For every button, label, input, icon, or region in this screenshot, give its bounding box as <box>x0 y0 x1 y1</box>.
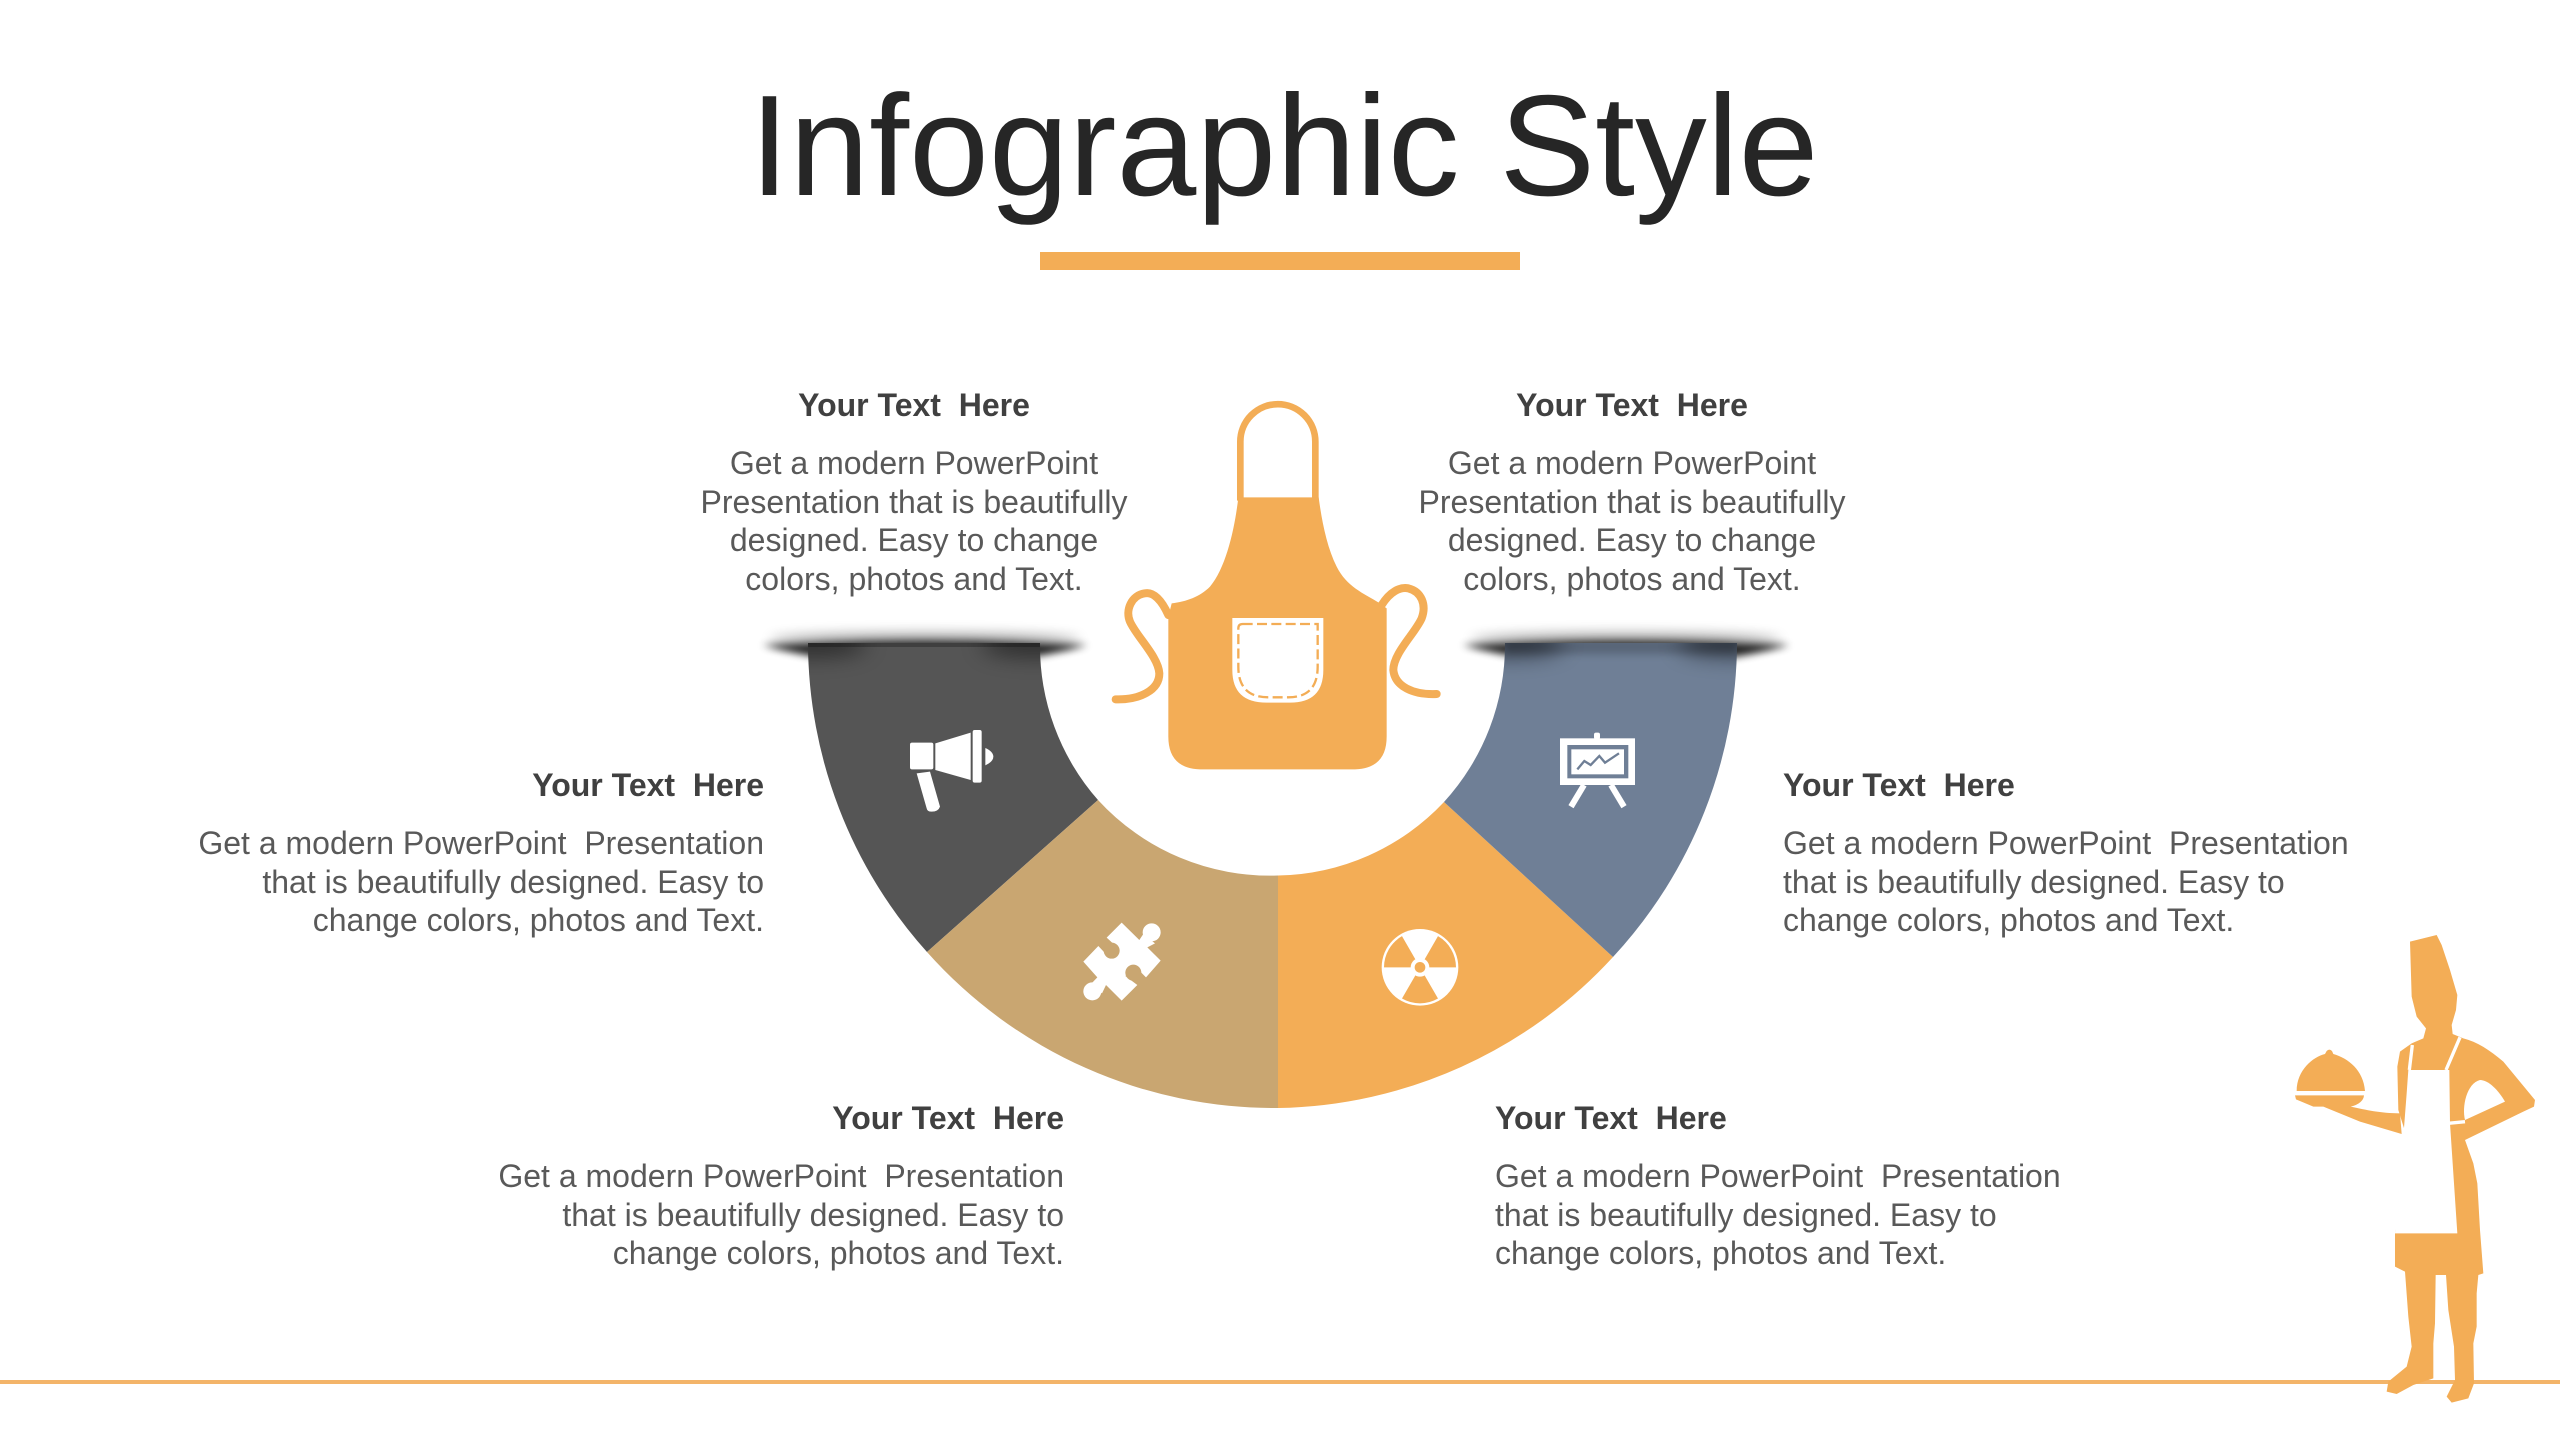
icon: megaphone <box>910 730 993 812</box>
text block: bottom right <box>1495 1100 2061 1271</box>
segment: orange <box>1278 802 1613 1108</box>
body: Get a modern PowerPoint Presentation that is beautifully designed. Easy to change colors, photos and Text. <box>198 825 764 938</box>
icon: puzzle piece <box>1083 923 1161 1001</box>
text block: middle left <box>198 767 764 938</box>
body: Get a modern PowerPoint Presentation that is beautifully designed. Easy to change colors, photos and Text. <box>701 445 1127 597</box>
title: Infographic Style <box>750 66 1818 226</box>
title underline <box>1040 252 1520 270</box>
text block: top left <box>701 387 1128 597</box>
apron straps <box>2409 1037 2465 1123</box>
icon: radiation symbol <box>1382 929 1458 1006</box>
segment: slate blue <box>1444 643 1737 957</box>
shadow: right ribbon <box>1462 633 1790 666</box>
heading: Your Text Here <box>532 767 764 803</box>
heading: Your Text Here <box>1495 1100 1727 1136</box>
chef left arm and hand <box>2295 1095 2402 1134</box>
body: Get a modern PowerPoint Presentation that is beautifully designed. Easy to change colors, photos and Text. <box>498 1158 1064 1271</box>
segment: dark grey <box>808 643 1098 952</box>
text block: middle right <box>1783 767 2349 938</box>
body: Get a modern PowerPoint Presentation that is beautifully designed. Easy to change colors, photos and Text. <box>1783 825 2349 938</box>
inner shading: dark segment <box>808 643 1040 666</box>
icon: apron <box>1116 404 1437 769</box>
heading: Your Text Here <box>832 1100 1064 1136</box>
icon: chef silhouette <box>2295 935 2535 1403</box>
baseline rule <box>0 1380 2560 1384</box>
apron cut-out <box>2395 1070 2457 1233</box>
text block: top right <box>1419 387 1846 597</box>
heading: Your Text Here <box>798 387 1030 423</box>
text block: bottom left <box>498 1100 1064 1271</box>
heading: Your Text Here <box>1516 387 1748 423</box>
cloche <box>2297 1050 2365 1091</box>
cut-out between arm and waist <box>2464 1080 2505 1120</box>
shadow: left ribbon <box>762 633 1088 666</box>
infographic artwork <box>0 252 2560 1403</box>
icon: presentation easel <box>1560 733 1635 807</box>
inner shading: blue segment <box>1504 643 1737 669</box>
segment: tan <box>927 800 1278 1108</box>
body: Get a modern PowerPoint Presentation that is beautifully designed. Easy to change colors, photos and Text. <box>1419 445 1845 597</box>
heading: Your Text Here <box>1783 767 2015 803</box>
body: Get a modern PowerPoint Presentation that is beautifully designed. Easy to change colors, photos and Text. <box>1495 1158 2061 1271</box>
